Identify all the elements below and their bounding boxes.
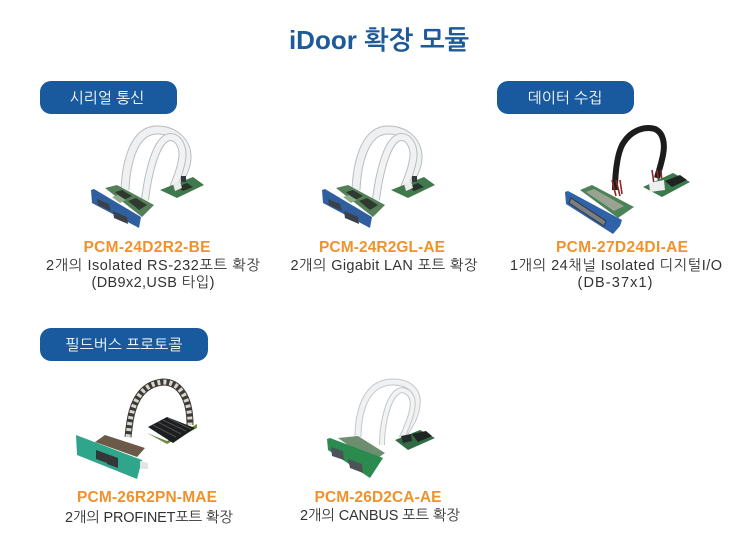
label: PCM-24D2R2-BE bbox=[46, 239, 260, 291]
label: PCM-24D2R2-BE: (DB9x2,USB 타입) bbox=[92, 275, 214, 291]
panel: fieldbus protocol heading bbox=[40, 328, 208, 361]
label: PCM-26R2PN-MAE: 2개의 PROFINET포트 확장 bbox=[65, 509, 233, 526]
label: PCM-24D2R2-BE: PCM-24D2R2-BE bbox=[84, 239, 210, 256]
icon: PCM-26D2CA-AE module bbox=[327, 382, 435, 478]
label: PCM-26D2CA-AE: 2개의 CANBUS 포트 확장 bbox=[300, 507, 460, 524]
label: PCM-27D24DI-AE: 1개의 24채널 Isolated 디지털I/O bbox=[510, 257, 722, 274]
panel: serial communication heading bbox=[40, 81, 177, 114]
label: PCM-26R2PN-MAE: PCM-26R2PN-MAE bbox=[77, 489, 217, 506]
icon: PCM-24R2GL-AE module bbox=[322, 130, 435, 228]
icon: PCM-24D2R2-BE module bbox=[91, 130, 204, 228]
panel: data acquisition heading: 데이터 수집 bbox=[528, 90, 602, 107]
label: PCM-27D24DI-AE bbox=[510, 239, 722, 291]
panel: data acquisition heading bbox=[497, 81, 634, 114]
label: PCM-26D2CA-AE: PCM-26D2CA-AE bbox=[314, 489, 442, 506]
label: PCM-27D24DI-AE: PCM-27D24DI-AE bbox=[556, 239, 688, 256]
icon: PCM-26R2PN-MAE module bbox=[76, 382, 197, 479]
label: PCM-26D2CA-AE bbox=[300, 489, 460, 524]
label: PCM-26R2PN-MAE bbox=[65, 489, 233, 526]
label: PCM-24R2GL-AE bbox=[290, 239, 478, 274]
label: PCM-24D2R2-BE: 2개의 Isolated RS-232포트 확장 bbox=[46, 257, 260, 274]
title: iDoor 확장 모듈 bbox=[289, 25, 469, 55]
label: PCM-24R2GL-AE: 2개의 Gigabit LAN 포트 확장 bbox=[290, 257, 478, 274]
label: PCM-27D24DI-AE: (DB-37x1) bbox=[578, 275, 652, 291]
icon: PCM-27D24DI-AE module bbox=[565, 128, 690, 234]
label: PCM-24R2GL-AE: PCM-24R2GL-AE bbox=[319, 239, 445, 256]
panel: fieldbus protocol heading: 필드버스 프로토콜 bbox=[66, 337, 182, 354]
panel: serial communication heading: 시리얼 통신 bbox=[70, 90, 144, 107]
